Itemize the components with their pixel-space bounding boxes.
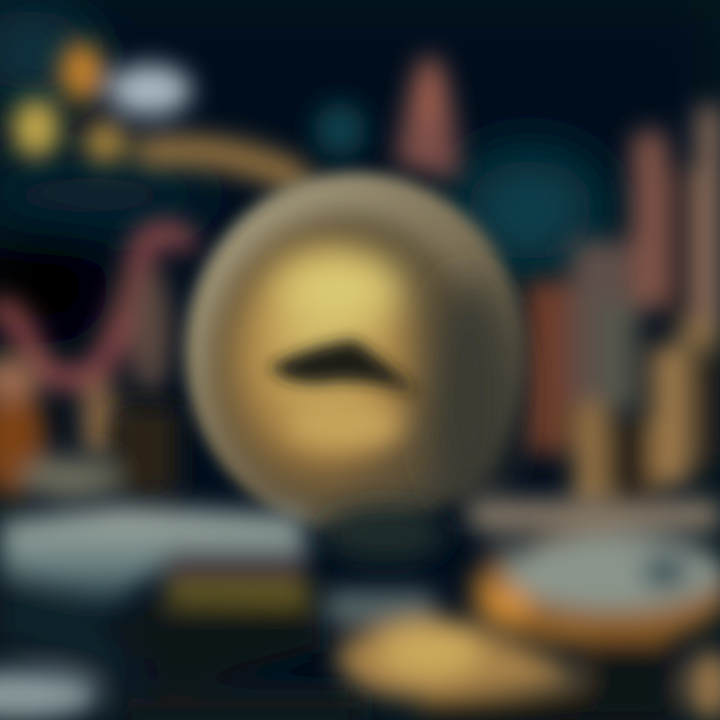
coin gold face <box>228 247 416 483</box>
plate rim <box>470 532 720 648</box>
dark under plate <box>590 640 670 720</box>
coin inner dark band <box>213 216 477 508</box>
icon: yellow coin light <box>12 98 60 158</box>
bar: gold lower towers <box>575 405 607 510</box>
bar: mid tower <box>570 240 630 410</box>
left pillar dark <box>0 356 178 500</box>
teal blob behind spike <box>314 102 366 158</box>
coin highlight <box>278 254 402 326</box>
coin base shadow <box>323 507 447 563</box>
coin rim <box>185 172 525 532</box>
coin shadow side <box>428 280 512 510</box>
gold corner <box>686 650 720 720</box>
top left: lights and arc <box>12 42 295 178</box>
bottom left: book stack <box>0 505 360 720</box>
gold slab <box>335 617 590 698</box>
orange glow <box>479 587 531 623</box>
dark base <box>420 698 620 720</box>
stack dark side <box>0 575 150 690</box>
red line chart left <box>0 232 185 460</box>
arc: orange chart band <box>150 151 295 178</box>
red spike <box>395 55 460 180</box>
right city bars <box>525 105 720 510</box>
surface behind <box>325 590 435 626</box>
coin dark emblem <box>268 340 420 395</box>
stack top <box>0 505 310 610</box>
plate blue mark <box>641 556 689 588</box>
coin lower highlight <box>287 401 403 449</box>
coloured stripes <box>165 552 305 578</box>
icon: pale cloud <box>108 64 192 116</box>
bottom middle and right <box>325 500 720 720</box>
plate top <box>505 534 720 610</box>
bar: pink tower <box>632 130 668 310</box>
icon: orange light <box>60 42 104 102</box>
floor <box>0 670 100 720</box>
coin <box>185 172 525 563</box>
icon: small gold light <box>83 120 127 164</box>
bar: right tower <box>698 105 720 325</box>
